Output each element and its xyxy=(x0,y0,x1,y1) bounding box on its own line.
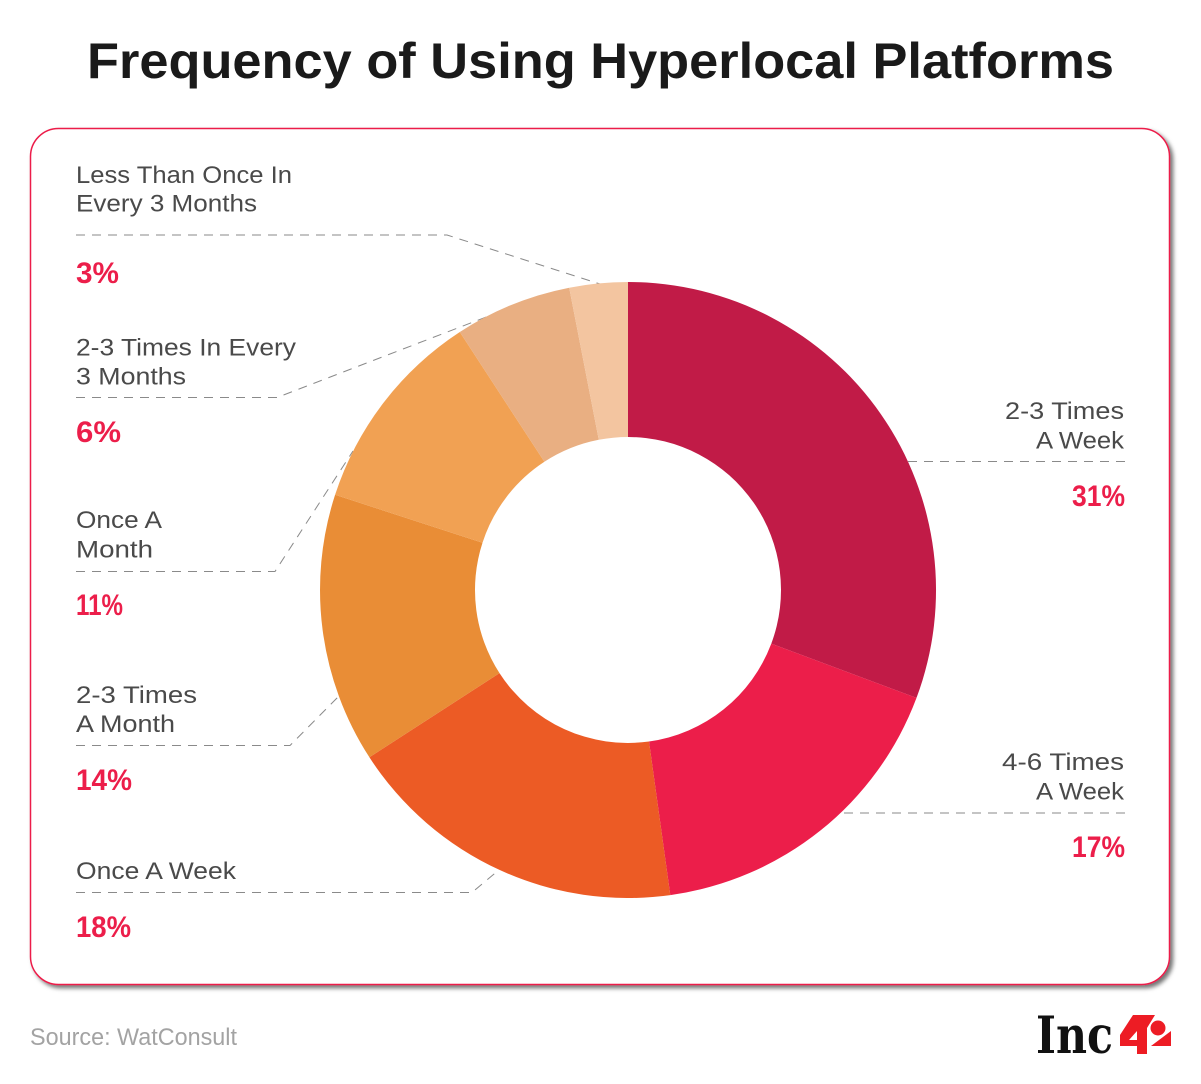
leader lines xyxy=(76,235,1125,892)
label: Less Than Once In Every 3 Months xyxy=(76,162,292,290)
panel: chart card xyxy=(30,128,1170,984)
slice: Less Than Once In Every 3 Months 3% xyxy=(569,282,628,440)
label: Once A Month: Once A xyxy=(76,507,163,534)
label: Once A Month xyxy=(76,507,163,622)
logo: Inc42 xyxy=(1036,1006,1171,1066)
label: 2-3 Times A Week: 2-3 Times xyxy=(1005,398,1124,425)
slice: 2-3 Times In Every 3 Months 6% xyxy=(460,288,599,462)
slice: 4-6 Times A Week 17% xyxy=(649,644,916,895)
slice: Once A Month 11% xyxy=(335,332,544,543)
label: 4-6 Times A Week: A Week xyxy=(1036,778,1125,806)
label: 2-3 Times A Week: A Week xyxy=(1036,428,1125,454)
label: Once A Week: Once A Week xyxy=(76,858,237,885)
label: Less Than Once In Every 3 Months: Less Than Once In xyxy=(76,162,292,189)
label: Once A Week: 18% xyxy=(76,911,131,944)
donut chart xyxy=(320,282,936,898)
source note: Source: WatConsult xyxy=(30,1024,237,1051)
label: 2-3 Times In Every 3 Months: 6% xyxy=(76,416,121,449)
label: 2-3 Times A Month: A Month xyxy=(76,711,175,738)
label: 2-3 Times In Every 3 Months xyxy=(76,334,297,449)
label: 4-6 Times A Week: 4-6 Times xyxy=(1002,749,1124,776)
label: Once A Month: Month xyxy=(76,536,153,564)
label: 2-3 Times A Week xyxy=(1005,398,1125,513)
slice: Once A Week 18% xyxy=(369,673,670,898)
label: Less Than Once In Every 3 Months: 3% xyxy=(76,257,119,290)
label: 2-3 Times In Every 3 Months: 3 Months xyxy=(76,364,186,390)
title: Frequency of Using Hyperlocal Platforms xyxy=(87,33,1114,89)
slice: 2-3 Times A Month 14% xyxy=(320,495,500,757)
label: 2-3 Times A Month: 14% xyxy=(76,764,132,797)
label: 2-3 Times A Month xyxy=(76,682,197,797)
label: Less Than Once In Every 3 Months: Every 3 Months xyxy=(76,190,257,218)
slice: 2-3 Times A Week 31% xyxy=(628,282,936,698)
label: 2-3 Times A Week: 31% xyxy=(1072,480,1125,513)
label: 2-3 Times A Month: 2-3 Times xyxy=(76,682,197,709)
logo: Inc42: Inc xyxy=(1036,1006,1113,1066)
label: 4-6 Times A Week xyxy=(1002,749,1125,864)
label: Once A Week xyxy=(76,858,237,944)
label: Once A Month: 11% xyxy=(76,589,123,622)
label: 4-6 Times A Week: 17% xyxy=(1072,831,1125,864)
label: 2-3 Times In Every 3 Months: 2-3 Times In Every xyxy=(76,334,297,362)
